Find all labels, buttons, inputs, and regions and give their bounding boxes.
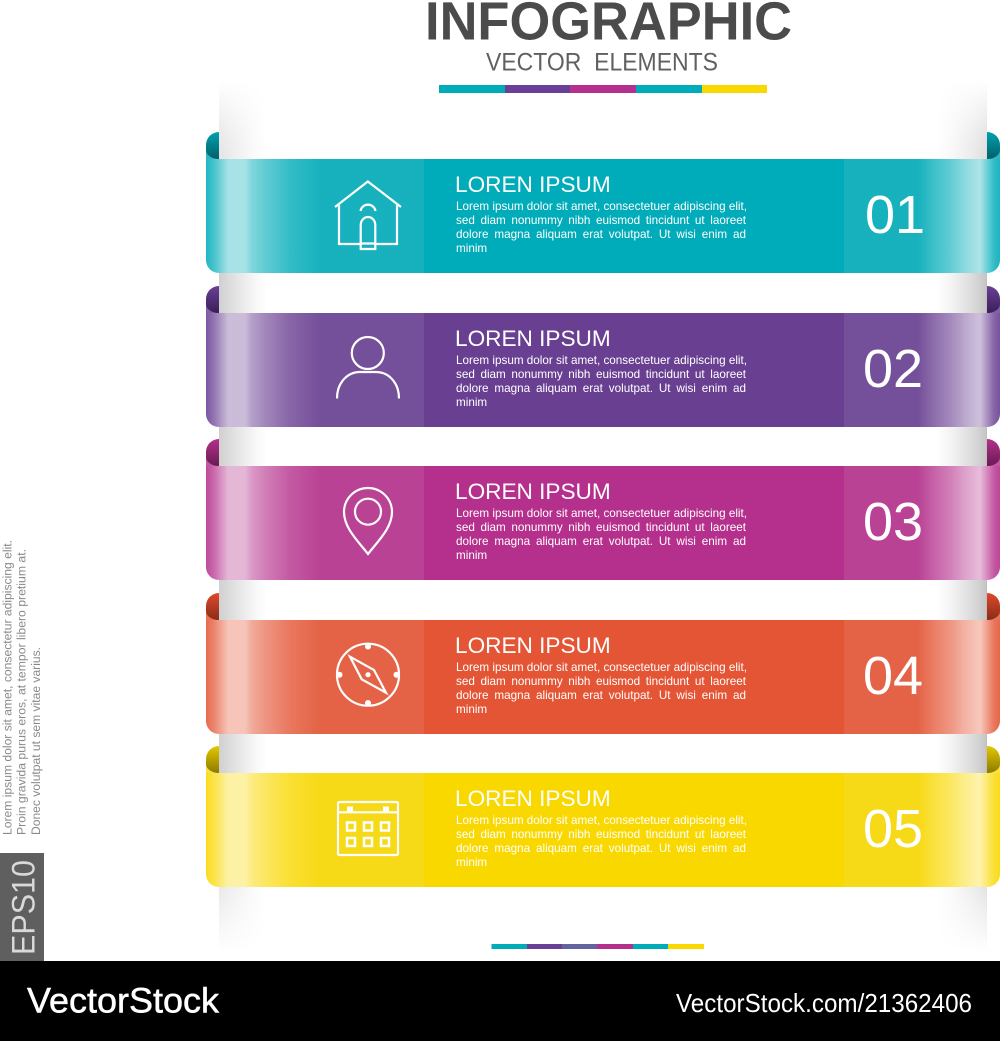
ribbon band — [206, 773, 1000, 887]
number 03: 03 — [863, 492, 923, 552]
left fold tab — [206, 132, 219, 159]
number 05: 05 — [863, 799, 923, 859]
heading: loren ipsum: LOREN IPSUM — [455, 326, 611, 351]
body text: minim — [456, 549, 487, 562]
body text: Lorem ipsum dolor sit amet, consectetuer adipiscing elit, — [456, 200, 747, 213]
icon: person — [336, 336, 400, 398]
rotated side text: Proin gravida purus eros, at tempor libero pretium at. — [16, 549, 28, 835]
left fold tab — [206, 593, 219, 620]
icon: house — [334, 180, 402, 250]
body text: sed diam nonummy nibh euismod tincidunt ut laoreet — [456, 675, 746, 688]
rotated side text: Donec volutpat ut sem vitae varius. — [31, 647, 43, 835]
right fold tab — [987, 593, 1000, 620]
left shadow of the back column — [219, 102, 255, 927]
footer url: VectorStock.com/21362406 — [676, 988, 972, 1018]
body text: Lorem ipsum dolor sit amet, consectetuer adipiscing elit, — [456, 354, 747, 367]
body text: Lorem ipsum dolor sit amet, consectetuer adipiscing elit, — [456, 661, 747, 674]
body text — [456, 507, 747, 562]
body text: dolore magna aliquam erat volutpat. Ut wisi enim ad — [456, 535, 746, 548]
number 04: 04 — [863, 646, 923, 706]
right fold tab — [987, 286, 1000, 313]
ribbon band — [206, 159, 1000, 273]
body text: sed diam nonummy nibh euismod tincidunt ut laoreet — [456, 828, 746, 841]
heading: loren ipsum: LOREN IPSUM — [455, 172, 611, 197]
body text: dolore magna aliquam erat volutpat. Ut wisi enim ad — [456, 228, 746, 241]
bottom colour bar — [492, 944, 704, 949]
panel 03: magenta ribbon — [206, 439, 1000, 580]
body text: Lorem ipsum dolor sit amet, consectetuer adipiscing elit, — [456, 814, 747, 827]
ribbon band — [206, 620, 1000, 734]
body text: Lorem ipsum dolor sit amet, consectetuer adipiscing elit, — [456, 507, 747, 520]
rotated side text: Lorem ipsum dolor sit amet, consectetur adipiscing elit. — [2, 540, 14, 835]
left fold tab — [206, 746, 219, 773]
body text: dolore magna aliquam erat volutpat. Ut wisi enim ad — [456, 842, 746, 855]
panel 05: yellow ribbon — [206, 746, 1000, 887]
title block — [425, 0, 792, 93]
body text: sed diam nonummy nibh euismod tincidunt ut laoreet — [456, 368, 746, 381]
heading: loren ipsum: LOREN IPSUM — [455, 786, 611, 811]
top colour bar — [439, 85, 767, 93]
ribbon band — [206, 313, 1000, 427]
body text: dolore magna aliquam erat volutpat. Ut wisi enim ad — [456, 689, 746, 702]
number 02: 02 — [863, 339, 923, 399]
number 01: 01 — [865, 185, 925, 245]
panel 04: orange ribbon — [206, 593, 1000, 734]
footer bar — [0, 961, 1000, 1041]
body text: minim — [456, 396, 487, 409]
rotated side text — [2, 540, 43, 835]
body text — [456, 661, 747, 716]
heading: loren ipsum: LOREN IPSUM — [455, 479, 611, 504]
footer logo: VectorStock — [27, 982, 220, 1020]
icon: calendar — [336, 800, 400, 856]
body text — [456, 200, 747, 255]
body text: minim — [456, 856, 487, 869]
body text: minim — [456, 242, 487, 255]
icon: compass — [336, 642, 400, 707]
subheading: vector elements: VECTOR ELEMENTS — [486, 48, 718, 76]
body text: dolore magna aliquam erat volutpat. Ut wisi enim ad — [456, 382, 746, 395]
body text — [456, 814, 747, 869]
body text: sed diam nonummy nibh euismod tincidunt ut laoreet — [456, 521, 746, 534]
body text — [456, 354, 747, 409]
panel 01: teal ribbon — [206, 132, 1000, 273]
panel 02: purple ribbon — [206, 286, 1000, 427]
icon: map pin — [342, 486, 394, 556]
left fold tab — [206, 286, 219, 313]
left fold tab — [206, 439, 219, 466]
heading: loren ipsum: LOREN IPSUM — [455, 633, 611, 658]
ribbon band — [206, 466, 1000, 580]
body text: minim — [456, 703, 487, 716]
right fold tab — [987, 439, 1000, 466]
body text: sed diam nonummy nibh euismod tincidunt ut laoreet — [456, 214, 746, 227]
right shadow of the back column — [947, 95, 987, 935]
right fold tab — [987, 746, 1000, 773]
right fold tab — [987, 132, 1000, 159]
EPS10 badge: EPS10 — [6, 860, 42, 955]
